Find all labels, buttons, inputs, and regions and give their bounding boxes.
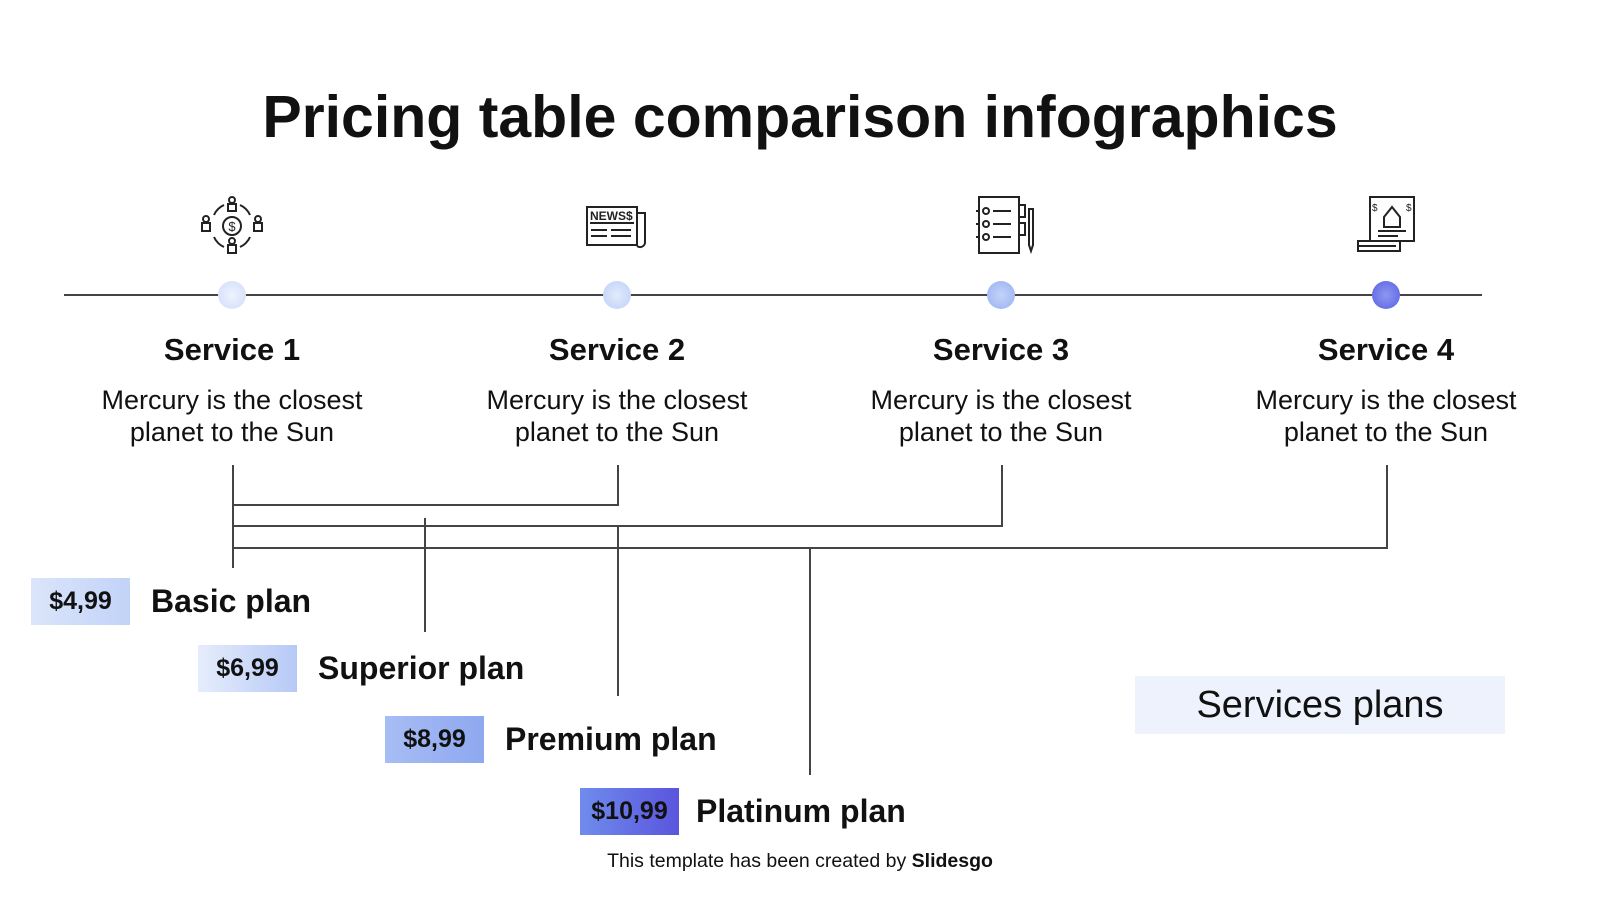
basic plan: $4,99: [49, 587, 112, 615]
dot 3: [987, 281, 1015, 309]
service 4: Mercury is the closest: [1255, 385, 1517, 415]
premium plan: Premium plan: [505, 721, 717, 757]
service 3: Mercury is the closest: [870, 385, 1132, 415]
icon: document money: [1357, 196, 1415, 252]
service 2: planet to the Sun: [515, 417, 719, 447]
service 4: [1255, 332, 1517, 447]
platinum plan: Platinum plan: [696, 793, 906, 829]
platinum plan: $10,99: [591, 797, 668, 825]
platinum plan: [580, 788, 906, 835]
icon: people money: $: [228, 219, 236, 234]
service 1: planet to the Sun: [130, 417, 334, 447]
dot 4: [1372, 281, 1400, 309]
superior plan: $6,99: [216, 654, 279, 682]
footer: This template has been created by Slidesgo: [607, 850, 993, 872]
dot 2: [603, 281, 631, 309]
icon: news: NEWS$: [590, 209, 633, 223]
title: Pricing table comparison infographics: [262, 84, 1338, 150]
service 3: planet to the Sun: [899, 417, 1103, 447]
service 4: planet to the Sun: [1284, 417, 1488, 447]
service 2: Service 2: [549, 332, 685, 367]
service 3: [870, 332, 1132, 447]
timeline line: [64, 294, 1482, 296]
icon: document money: $: [1406, 203, 1412, 214]
service 2: [486, 332, 748, 447]
services plans label: [1135, 676, 1505, 734]
basic plan: [31, 578, 311, 625]
icon: document money: $: [1372, 203, 1378, 214]
service 1: [101, 332, 363, 447]
dot 1: [218, 281, 246, 309]
icon: notebook: [976, 196, 1034, 254]
premium plan: $8,99: [403, 725, 466, 753]
service 1: Mercury is the closest: [101, 385, 363, 415]
premium plan: [385, 716, 717, 763]
service 3: Service 3: [933, 332, 1069, 367]
service 4: Service 4: [1318, 332, 1454, 367]
icon: news: [586, 206, 646, 248]
services plans label: Services plans: [1196, 684, 1444, 726]
superior plan: [198, 645, 524, 692]
service 1: Service 1: [164, 332, 300, 367]
superior plan: Superior plan: [318, 650, 524, 686]
service 2: Mercury is the closest: [486, 385, 748, 415]
icon: people money: [201, 196, 263, 254]
basic plan: Basic plan: [151, 583, 311, 619]
